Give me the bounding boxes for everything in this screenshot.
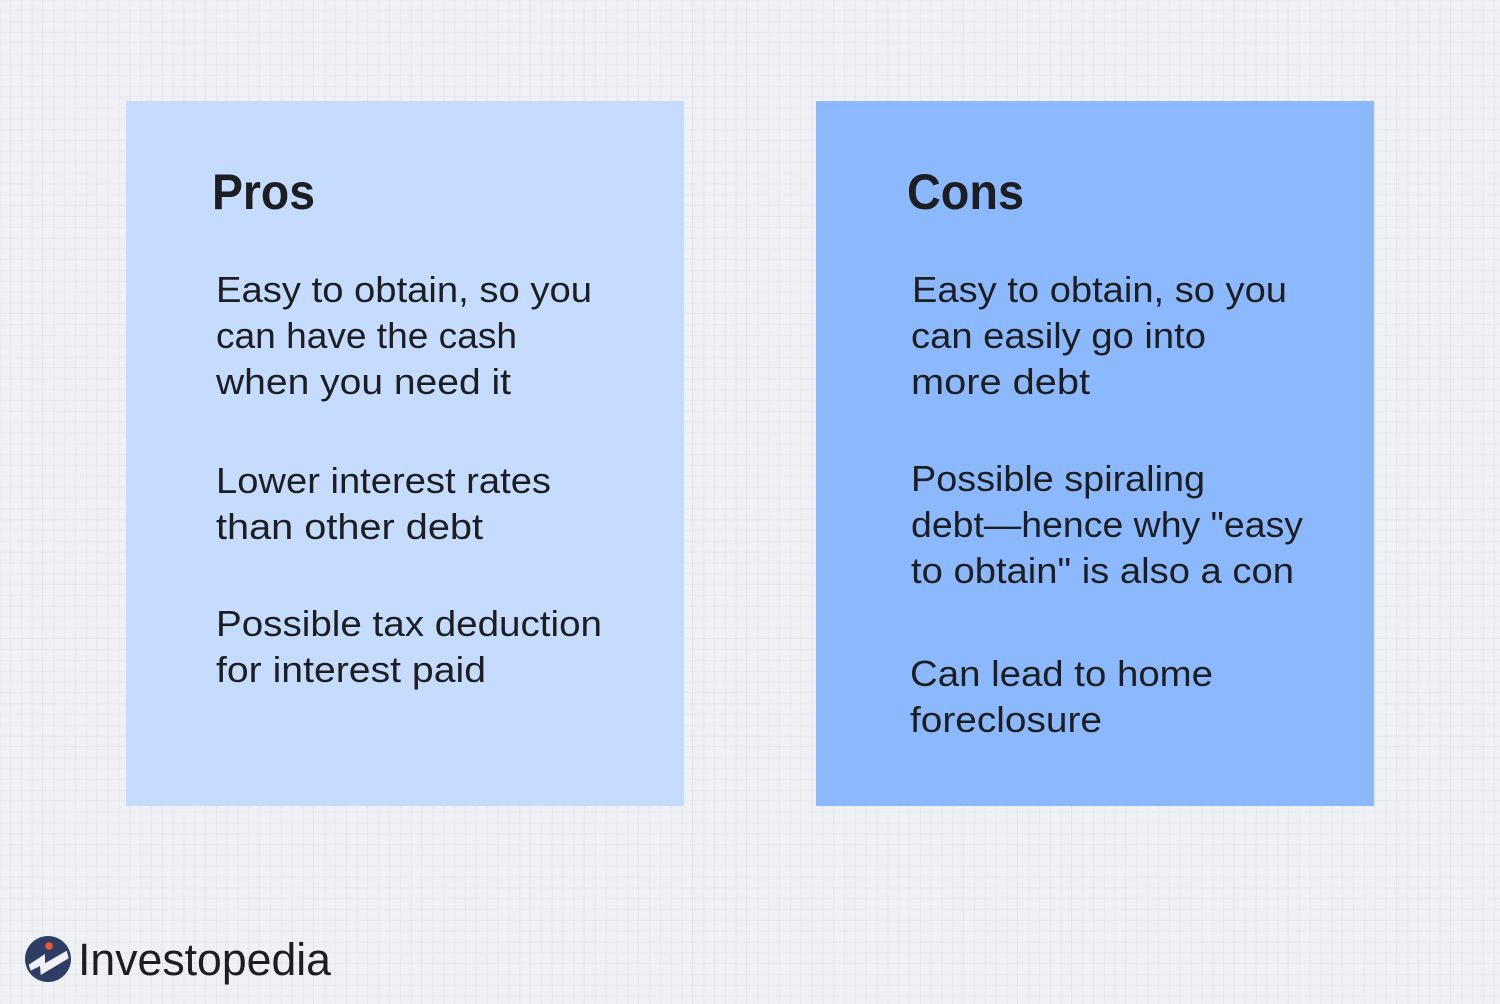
heading: pros: Pros	[212, 164, 315, 220]
text block: possible spiraling debt: Possible spiraling	[911, 458, 1205, 499]
text block: possible tax deduction: for interest paid	[216, 649, 486, 690]
text block: easy to obtain: more debt	[911, 361, 1090, 402]
text block: home foreclosure	[910, 653, 1213, 740]
panel: pros	[126, 101, 684, 806]
text block: possible spiraling debt: to obtain" is also a con	[911, 550, 1294, 591]
text block: possible spiraling debt: debt—hence why "easy	[911, 504, 1303, 545]
text block: possible tax deduction	[216, 603, 602, 690]
icon: investopedia mark	[25, 936, 71, 982]
text block: easy to obtain: Easy to obtain, so you	[912, 269, 1287, 310]
text block: possible tax deduction: Possible tax deduction	[216, 603, 602, 644]
text block: home foreclosure: Can lead to home	[910, 653, 1213, 694]
text block: easy to obtain: Easy to obtain, so you	[216, 269, 592, 310]
text block: possible spiraling debt	[911, 458, 1303, 591]
text block: easy to obtain: when you need it	[215, 361, 511, 402]
text block: easy to obtain: can easily go into	[911, 315, 1206, 356]
heading: cons: Cons	[907, 164, 1024, 220]
text block: home foreclosure: foreclosure	[910, 699, 1102, 740]
panel: cons	[816, 101, 1374, 806]
text block: lower interest rates: Lower interest rates	[216, 460, 551, 501]
wordmark: Investopedia	[78, 934, 332, 985]
logo: investopedia	[25, 934, 332, 985]
text block: lower interest rates	[216, 460, 551, 547]
text block: lower interest rates: than other debt	[216, 506, 483, 547]
text block: easy to obtain	[911, 269, 1287, 402]
text block: easy to obtain: can have the cash	[216, 315, 517, 356]
text block: easy to obtain	[215, 269, 592, 402]
